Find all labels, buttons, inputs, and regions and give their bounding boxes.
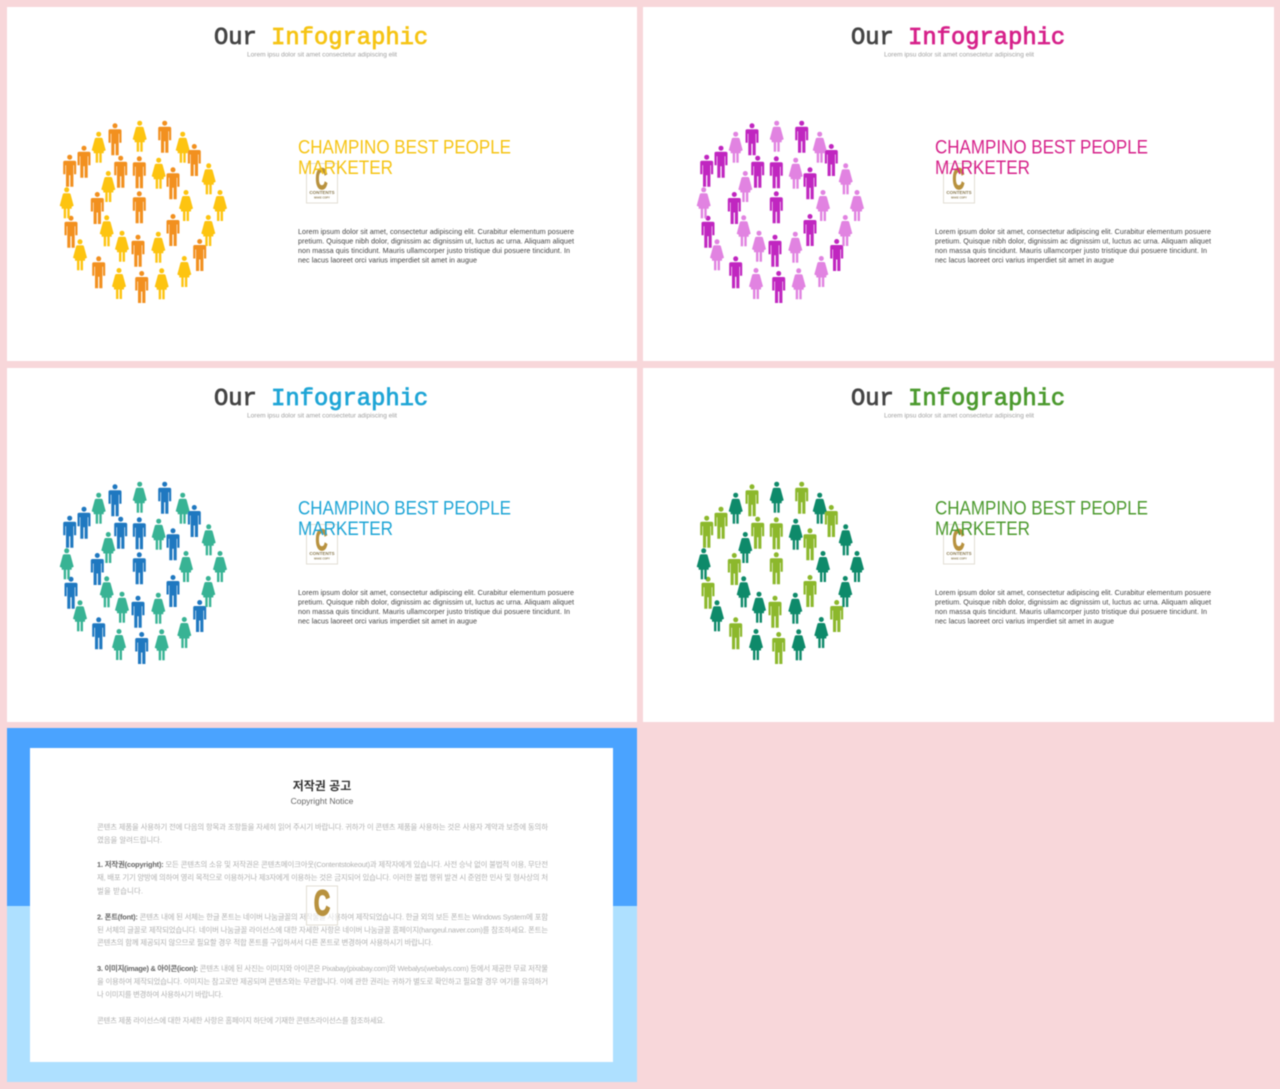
notice item 3: image and icon (97, 964, 548, 999)
body text: yellow slide: Lorem ipsum dolor sit amet, consectetur adipiscing elit. Curabitur elementum posuere (298, 227, 574, 236)
body text: green slide: Lorem ipsum dolor sit amet, consectetur adipiscing elit. Curabitur elementum posuere (935, 588, 1211, 597)
panel: blue slide (7, 368, 637, 722)
notice subheading: Copyright Notice (291, 796, 354, 806)
title: green slide: Our Infographic (851, 386, 1065, 413)
heading: magenta slide (935, 138, 1148, 179)
body text: magenta slide: pretium. Quisque nibh dolor, dignissim ac dignissim ut, luctus ac urna. Aliquam aliquet (935, 236, 1211, 246)
body text: blue slide (298, 588, 574, 626)
notice item 1: copyright: 재, 배포 기기 양방에 의하여 영리 목적으로 이용하거나 제3자에게 이용하는 것은 금지되어 있습니다. 이러한 불법 행위 발견 시 준엄한 민사 및 형사상의 처 (97, 873, 548, 882)
body text: blue slide: pretium. Quisque nibh dolor, dignissim ac dignissim ut, luctus ac urna. Aliquam aliquet (298, 598, 574, 606)
heading: blue slide: CHAMPINO BEST PEOPLE (298, 498, 511, 520)
body text: blue slide: nec lacus laoreet orci varius imperdiet sit amet in augue (298, 616, 477, 626)
people circle chart: lime men and dark teal women (697, 482, 864, 664)
notice item 1: copyright: 1. 저작권(copyright): 모든 콘텐츠의 소유 및 저작권은 콘텐츠메이크아웃(Contentstokeout)과 제작자에게 있습니다. 사전 승낙 없이 불법적 이용, 무단전 (97, 860, 548, 869)
heading: green slide: CHAMPINO BEST PEOPLE (935, 498, 1148, 520)
logo watermark (944, 524, 974, 564)
subtitle: yellow slide: Lorem ipsu dolor sit amet consectetur adipiscing elit (247, 52, 397, 58)
body text: green slide: non massa quis tincidunt. Mauris ullamcorper justo tristique dui posuere tincidunt. In (935, 607, 1207, 616)
panel: green slide (643, 368, 1274, 722)
body text: yellow slide: nec lacus laoreet orci varius imperdiet sit amet in augue (298, 256, 477, 264)
subtitle: blue slide: Lorem ipsu dolor sit amet consectetur adipiscing elit (247, 412, 397, 420)
heading: magenta slide: CHAMPINO BEST PEOPLE (935, 138, 1148, 158)
notice item 1: copyright (97, 860, 548, 896)
subtitle: magenta slide: Lorem ipsu dolor sit amet consectetur adipiscing elit (884, 52, 1034, 58)
subtitle: green slide: Lorem ipsu dolor sit amet consectetur adipiscing elit (884, 412, 1034, 420)
notice item 2: font: 된 서체의 글꼴로 제작되었습니다. 네이버 나눔글꼴 라이선스에 대한 자세한 사항은 네이버 나눔글꼴 홈페이지(hangeul.naver.com)를 참조하세요. 폰트는 (97, 926, 548, 934)
logo watermark (306, 163, 338, 203)
body text: green slide: nec lacus laoreet orci varius imperdiet sit amet in augue (935, 616, 1114, 626)
logo watermark (944, 163, 974, 203)
notice heading: 저작권 공고 (293, 778, 351, 793)
heading: yellow slide: MARKETER (298, 158, 393, 179)
people circle chart: orange men and yellow women (60, 121, 227, 303)
notice intro: 콘텐츠 제품을 사용하기 전에 다음의 항목과 조항들을 자세히 읽어 주시기 바랍니다. 귀하가 이 콘텐츠 제품을 사용하는 것은 사용자 계약과 보증에 동의하 (97, 822, 548, 832)
logo watermark: notice (306, 884, 338, 925)
body text: yellow slide (298, 227, 574, 264)
notice item 3: image and icon: 나 이미지를 변경하여 사용하시기 바랍니다. (97, 990, 223, 999)
title: yellow slide: Our Infographic (214, 25, 428, 52)
notice item 2: font: 2. 폰트(font): 콘텐츠 내에 된 서체는 한글 폰트는 네이버 나눔글꼴의 저작물을 사용하여 제작되었습니다. 한글 외의 보든 폰트는 Windows System에 포함 (97, 912, 548, 922)
body text: yellow slide: non massa quis tincidunt. Mauris ullamcorper justo tristique dui posuere tincidunt. In (298, 246, 570, 255)
heading: yellow slide: CHAMPINO BEST PEOPLE (298, 138, 511, 158)
panel: copyright notice (7, 728, 637, 1082)
notice item 2: font: 콘텐츠의 함께 제공되지 않으므로 필요할 경우 적합 폰트를 구입하셔서 다른 폰트로 변경하여 사용하시기 바랍니다. (97, 938, 433, 947)
title: magenta slide: Our Infographic (851, 25, 1065, 52)
heading: magenta slide: MARKETER (935, 158, 1030, 179)
notice item 1: copyright: 벌을 받습니다. (97, 886, 143, 896)
body text: magenta slide: nec lacus laoreet orci varius imperdiet sit amet in augue (935, 256, 1114, 264)
heading: blue slide: MARKETER (298, 519, 393, 540)
heading: blue slide (298, 498, 511, 540)
people circle chart: blue men and teal women (60, 482, 227, 664)
notice intro: 였음을 알려드립니다. (97, 836, 162, 844)
logo watermark (306, 524, 338, 564)
notice closing line: 콘텐츠 제품 라이선스에 대한 자세한 사항은 홈페이지 하단에 기재한 콘텐츠라이선스를 참조하세요. (97, 1016, 385, 1025)
body text: blue slide: non massa quis tincidunt. Mauris ullamcorper justo tristique dui posuere tincidunt. In (298, 607, 570, 616)
people circle chart: purple men and pink women (697, 121, 864, 303)
body text: magenta slide: Lorem ipsum dolor sit amet, consectetur adipiscing elit. Curabitur elementum posuere (935, 227, 1211, 236)
panel: yellow slide (7, 7, 637, 361)
heading: green slide: MARKETER (935, 519, 1030, 540)
body text: magenta slide (935, 227, 1211, 264)
notice intro (97, 822, 548, 844)
notice item 2: font (97, 912, 548, 947)
heading: green slide (935, 498, 1148, 540)
body text: blue slide: Lorem ipsum dolor sit amet, consectetur adipiscing elit. Curabitur elementum posuere (298, 588, 574, 597)
body text: magenta slide: non massa quis tincidunt. Mauris ullamcorper justo tristique dui posuere tincidunt. In (935, 246, 1207, 255)
title: blue slide: Our Infographic (214, 386, 428, 413)
body text: green slide (935, 588, 1211, 626)
heading: yellow slide (298, 138, 511, 179)
body text: yellow slide: pretium. Quisque nibh dolor, dignissim ac dignissim ut, luctus ac urna. Aliquam aliquet (298, 236, 574, 246)
panel: magenta slide (643, 7, 1274, 361)
notice item 3: image and icon: 을 이용하여 제작되었습니다. 이미지는 참고로만 제공되며 콘텐츠와는 무관합니다. 이에 관한 권리는 귀하가 별도로 확인하고 필요할 경우 여기를 유의하거 (97, 977, 548, 986)
logo watermark: notice: C (314, 884, 330, 923)
body text: green slide: pretium. Quisque nibh dolor, dignissim ac dignissim ut, luctus ac urna. Aliquam aliquet (935, 598, 1211, 606)
notice item 3: image and icon: 3. 이미지(image) & 아이콘(icon): 콘텐츠 내에 된 사진는 이미지와 아이콘은 Pixabay(pixabay.com)와 Webalys(webalys.com) 등에서 제공한 무료 저작물 (97, 964, 548, 973)
